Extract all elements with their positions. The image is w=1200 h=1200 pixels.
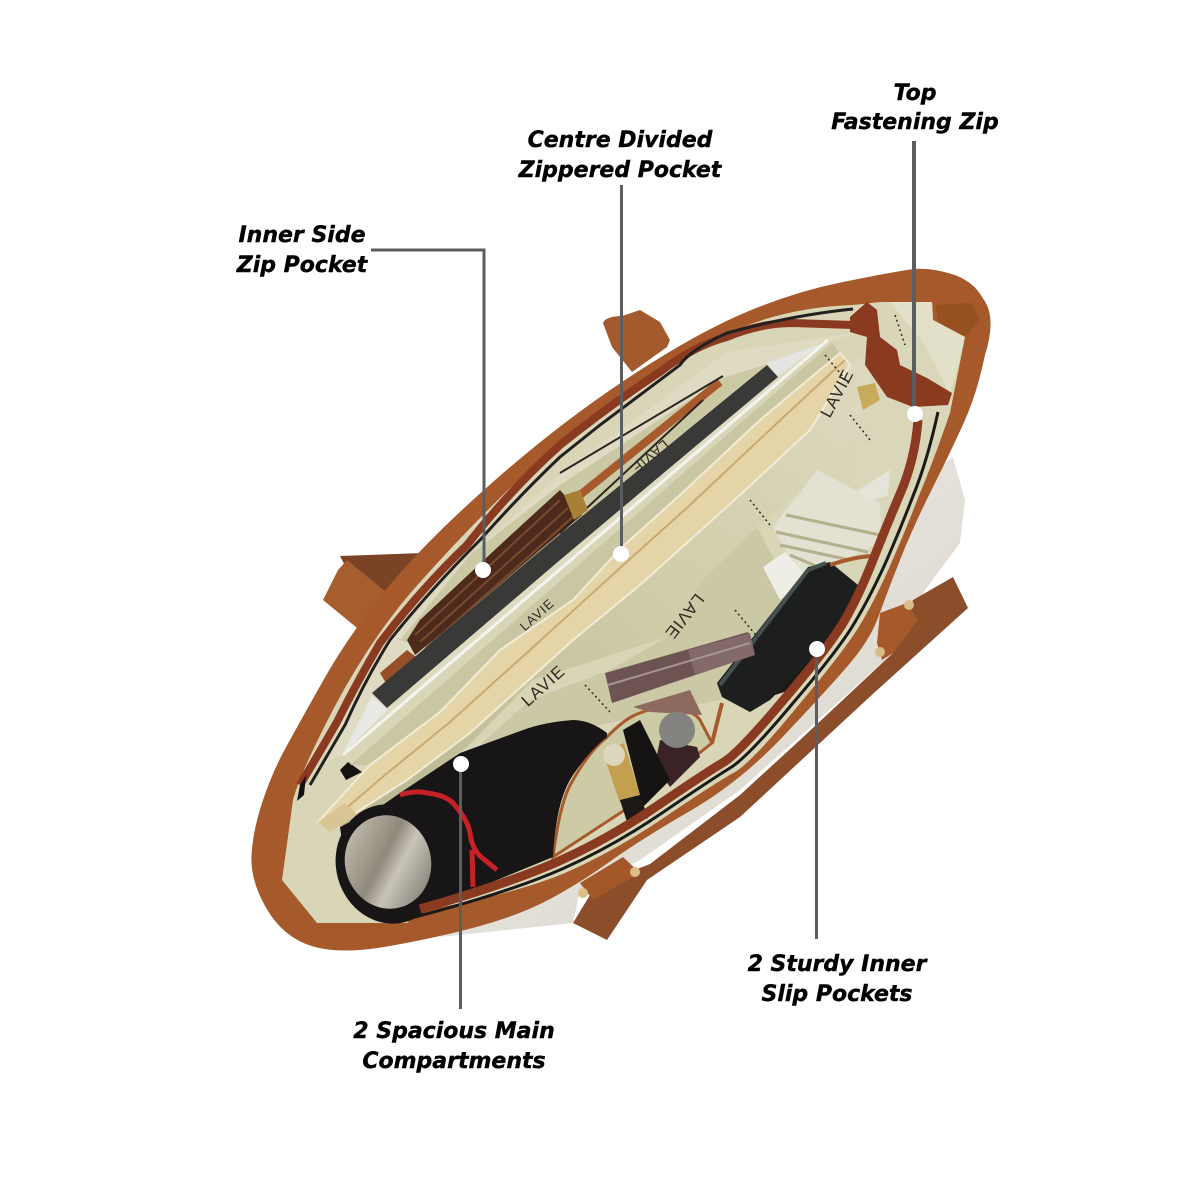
label: centre divided zippered pocket: Centre Divided [528, 128, 712, 153]
inner deep lining [480, 527, 790, 745]
rust zip end tab [850, 302, 952, 407]
label: 2 sturdy inner slip pockets: Slip Pockets [762, 982, 912, 1007]
outer bag body side [440, 457, 965, 937]
bag illustration [251, 269, 991, 950]
back handle lower [323, 553, 423, 632]
brand print on lining [517, 315, 905, 712]
label: inner side zip pocket: Zip Pocket [236, 253, 369, 278]
gold tag [857, 383, 880, 410]
inner cavity lining [282, 302, 965, 923]
brand print on lining: LAVIE [628, 437, 672, 477]
label: 2 spacious main compartments: 2 Spacious Main [353, 1019, 555, 1044]
slip pocket with cosmetics [553, 690, 722, 857]
brand print on lining: LAVIE [517, 595, 557, 634]
label: 2 spacious main compartments: Compartments [362, 1049, 546, 1074]
power adapter and cable [763, 470, 890, 600]
laptop [340, 340, 828, 780]
strap rivets right [875, 600, 914, 657]
strap rivets bottom [578, 867, 640, 898]
white top fold [890, 302, 965, 395]
mascara tube [605, 632, 755, 703]
label: top fastening zip: Top [893, 81, 937, 106]
water bottle [322, 720, 607, 936]
leader line: inner side zip pocket [371, 250, 491, 578]
strap loop right [877, 603, 918, 660]
label: centre divided zippered pocket: Zippered Pocket [518, 158, 723, 183]
centre zipper tape [318, 353, 850, 832]
pocket lining under laptop [350, 343, 840, 765]
leader line: spacious main compartments [453, 756, 469, 1009]
side zip pocket wallet [380, 376, 723, 685]
leader line: centre divided zippered pocket [613, 185, 629, 562]
dark pocket interior [760, 575, 868, 700]
power bank [717, 562, 858, 712]
label: inner side zip pocket: Inner Side [238, 223, 366, 248]
front zipper [415, 412, 938, 917]
back lining above laptop [320, 332, 860, 765]
leader line: sturdy inner slip pockets [809, 641, 825, 939]
pocket strap binding [830, 556, 870, 565]
front fold panel [340, 340, 905, 830]
leader line: top fastening zip [907, 141, 923, 422]
tan leather rim [251, 269, 991, 950]
top zipper [297, 309, 853, 801]
right side lining [850, 340, 950, 540]
back handle upper [603, 310, 670, 372]
strap loop bottom [580, 857, 640, 900]
brand print on lining: LAVIE [661, 590, 708, 643]
side pocket lining [400, 364, 767, 650]
front strap [573, 577, 968, 940]
label: top fastening zip: Fastening Zip [831, 110, 999, 135]
brand print on lining: LAVIE [817, 366, 858, 421]
brand print on lining: LAVIE [518, 661, 569, 710]
rim dark corner fold [935, 303, 980, 337]
label: 2 sturdy inner slip pockets: 2 Sturdy Inner [748, 952, 926, 977]
